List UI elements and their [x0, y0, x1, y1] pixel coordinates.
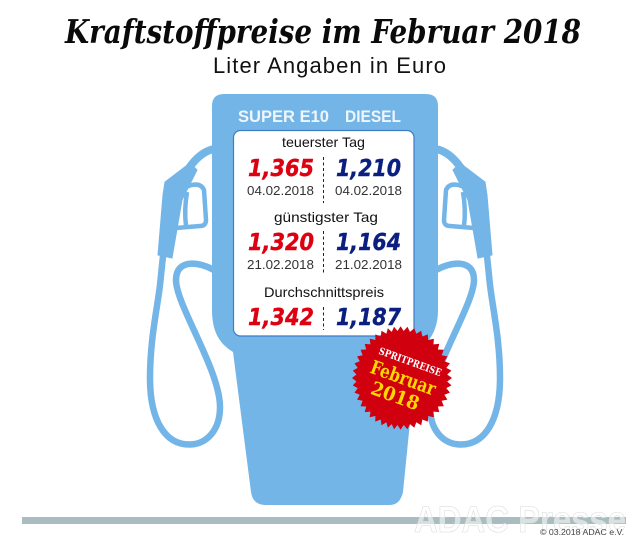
subtitle: Liter Angaben in Euro: [213, 53, 446, 78]
section: Durchschnittspreis: 1,187: [336, 305, 401, 331]
section: günstigster Tag: günstigster Tag: [274, 209, 378, 225]
right nozzle body: [453, 163, 492, 258]
right trigger guard: [444, 185, 474, 228]
badge: Spritpreise Februar 2018: [352, 326, 452, 430]
left nozzle body: [158, 163, 197, 258]
section: teuerster Tag: teuerster Tag: [282, 134, 365, 150]
right nozzle and hose: [430, 149, 500, 445]
heading: super e10: SUPER E10: [238, 108, 329, 126]
badge starburst: [352, 326, 452, 430]
copyright: © 03.2018 ADAC e.V.: [540, 527, 624, 537]
section: Durchschnittspreis: 1,342: [248, 305, 314, 331]
footer bar: [22, 517, 626, 524]
price panel: [234, 130, 414, 336]
heading: diesel: DIESEL: [345, 108, 401, 126]
column divider: [322, 157, 324, 330]
section: teuerster Tag: [247, 134, 402, 198]
section: günstigster Tag: 1,320: [248, 230, 314, 256]
left trigger guard: [176, 185, 206, 228]
left hose loop: [150, 256, 220, 445]
left nozzle and hose: [150, 149, 220, 445]
column headings: [238, 108, 401, 126]
badge text: [367, 346, 443, 415]
badge text: 2018: [368, 377, 422, 415]
badge text: SPRITPREISE: [377, 346, 443, 379]
left upper hose: [189, 149, 214, 168]
section: günstigster Tag: 1,164: [336, 230, 401, 256]
right hose loop: [430, 256, 500, 445]
badge text: Februar: [367, 356, 440, 401]
section: günstigster Tag: 21.02.2018: [335, 257, 402, 272]
section: teuerster Tag: 04.02.2018: [335, 183, 402, 198]
section: günstigster Tag: [247, 209, 402, 272]
section: günstigster Tag: 21.02.2018: [247, 257, 314, 272]
right upper hose: [436, 149, 461, 168]
panel background: [234, 130, 414, 336]
section: teuerster Tag: 04.02.2018: [247, 183, 314, 198]
section: Durchschnittspreis: [248, 284, 401, 331]
section: teuerster Tag: 1,365: [248, 156, 314, 182]
section: teuerster Tag: 1,210: [336, 156, 401, 182]
section: Durchschnittspreis: Durchschnittspreis: [264, 284, 384, 300]
fuel pump body: [212, 94, 438, 505]
